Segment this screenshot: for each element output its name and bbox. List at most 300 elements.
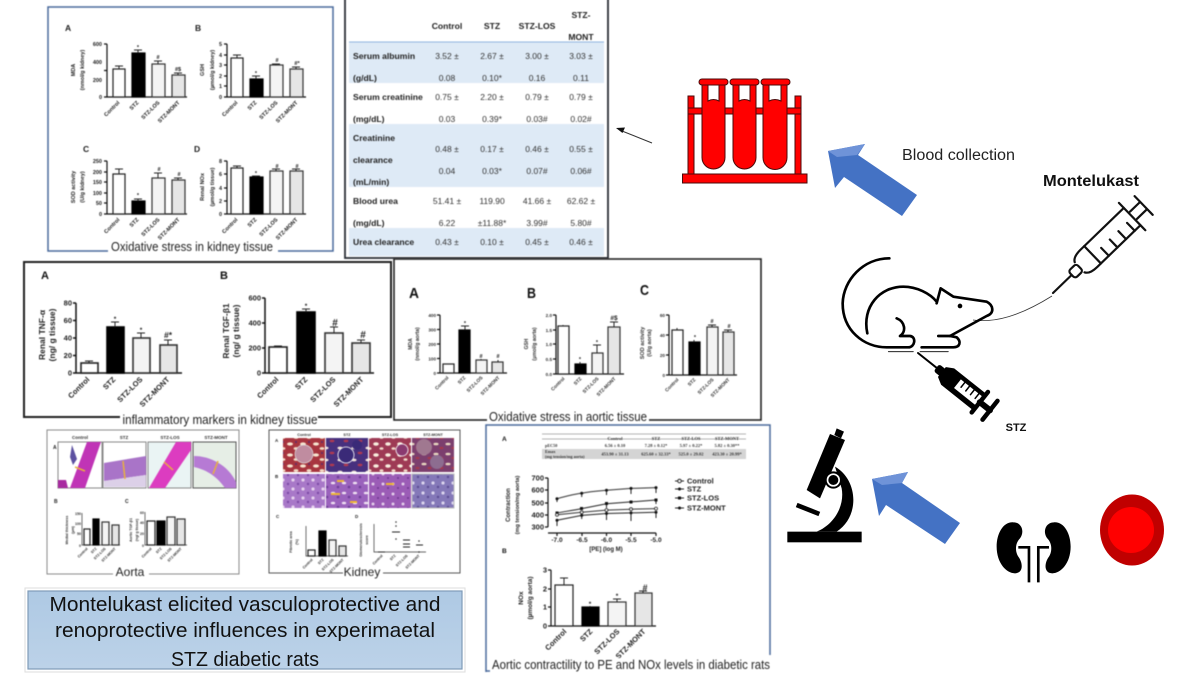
arrow: to microscope <box>872 472 960 544</box>
row: creatinine clearance: 0.06# <box>570 166 592 176</box>
chart A: kidney MDA: #$ <box>175 67 181 73</box>
chart D: glomerulosclerosis score: Control <box>372 554 384 566</box>
chart B: medial thickness: (µm) <box>71 525 75 534</box>
mini table: pEC50 and Emax: STZ <box>652 436 660 441</box>
chart C: kidney SOD: STZ-MONT <box>157 217 182 242</box>
chart B: renal TGF-beta1: B <box>220 270 228 282</box>
mini table: pEC50 and Emax <box>542 434 746 459</box>
chart C: fibrotic area: Control <box>302 558 314 570</box>
panel: inflammatory markers in kidney tissue <box>24 262 391 427</box>
legend: treatment groups <box>675 476 726 512</box>
mini table: pEC50 and Emax: 625.60 ± 32.33* <box>641 452 671 456</box>
bar chart: NOx in aorta: STZ-LOS <box>592 627 621 656</box>
row: creatinine clearance: clearance <box>353 155 393 165</box>
table header <box>432 10 594 42</box>
row: serum creatinine: 0.79 ± <box>569 92 593 102</box>
panel: kidney histology: D <box>355 514 359 519</box>
chart B: kidney GSH: STZ-MONT <box>275 100 300 125</box>
icon: STZ syringe <box>910 343 998 420</box>
chart B: kidney GSH: 0 <box>219 95 222 101</box>
mini table: pEC50 and Emax: 423.30 ± 20.99* <box>712 452 742 456</box>
chart A: renal TNF-alpha: STZ <box>101 375 118 391</box>
chart D: glomerulosclerosis score: STZ-LOS <box>395 553 409 568</box>
bar chart: NOx in aorta: NOx <box>518 591 525 605</box>
bar chart: NOx in aorta: 2 <box>543 584 547 594</box>
chart B: aortic GSH: 1.5 <box>546 328 552 333</box>
row: serum creatinine: 0.02# <box>570 114 592 124</box>
chart A: aortic MDA: STZ-MONT <box>480 375 501 397</box>
row: serum albumin: 0.16 <box>529 73 546 83</box>
icon: rat <box>843 258 992 352</box>
title box <box>25 588 465 672</box>
chart C: kidney SOD: # <box>157 167 161 173</box>
chart C: kidney SOD: 150 <box>93 180 102 186</box>
title box: STZ diabetic rats <box>171 648 319 671</box>
panel: oxidative stress in kidney tissue <box>48 7 333 254</box>
chart C: fibrotic area: Fibrotic area <box>289 530 293 553</box>
chart C: fibrotic area: (%) <box>295 538 299 545</box>
chart B: kidney GSH: # <box>275 58 279 64</box>
chart D: glomerulosclerosis score: STZ-MONT <box>405 553 421 570</box>
chart A: kidney MDA: (nmol/g kidney) <box>80 50 86 90</box>
row: blood urea <box>353 196 595 228</box>
chart B: aortic GSH <box>524 285 624 398</box>
chart A: kidney MDA: STZ-LOS <box>141 100 162 121</box>
panel: kidney histology: B <box>275 474 279 479</box>
chart B: kidney GSH: 3 <box>219 63 222 69</box>
chart A: renal TNF-alpha: Control <box>66 375 91 400</box>
line chart: contraction vs PE <box>506 474 662 553</box>
chart C: aortic TGF-beta: 60 <box>140 511 144 515</box>
chart C: aortic TGF-beta: STZ-LOS <box>159 546 173 561</box>
table header: STZ- <box>571 10 591 20</box>
chart A: aortic MDA: A <box>409 285 419 302</box>
chart A: aortic MDA: * <box>464 321 467 327</box>
legend: treatment groups: STZ <box>687 484 702 494</box>
title box: renoprotective influences in experimaetal <box>55 619 435 642</box>
chart C: kidney SOD <box>71 144 187 242</box>
row: serum creatinine: 0.75 ± <box>435 92 459 102</box>
line chart: contraction vs PE: -5.5 <box>625 537 637 544</box>
chart D: renal NOx: D <box>194 144 200 154</box>
chart D: renal NOx: # <box>275 164 279 170</box>
chart A: aortic MDA: MDA <box>408 338 414 350</box>
chart B: renal TGF-beta1: STZ-MONT <box>332 375 366 409</box>
bar chart: NOx in aorta: 1 <box>543 602 547 612</box>
thread from syringe to rat <box>973 296 1052 321</box>
line chart: contraction vs PE: -5.0 <box>650 537 662 544</box>
chart B: aortic GSH: 1.0 <box>546 342 552 347</box>
row: serum creatinine: 0.39* <box>482 114 503 124</box>
line chart: contraction vs PE: 300 <box>531 522 544 532</box>
chart C: aortic SOD: SOD activity <box>640 326 646 359</box>
table header: STZ-LOS <box>519 21 556 31</box>
chart C: aortic TGF-beta: STZ-MONT <box>167 546 183 563</box>
chart C: kidney SOD: 250 <box>93 159 102 165</box>
chart A: renal TNF-alpha: 0 <box>68 368 72 378</box>
chart A: kidney MDA: Control <box>103 100 122 118</box>
chart B: aortic GSH: 0.5 <box>546 357 552 362</box>
chart B: renal TGF-beta1: 400 <box>248 318 261 328</box>
table header: MONT <box>568 32 594 42</box>
chart B: medial thickness: 50 <box>77 532 81 536</box>
row: serum creatinine: (mg/dL) <box>353 114 385 124</box>
chart C: aortic TGF-beta: Control <box>141 547 153 559</box>
chart C: aortic SOD: 60 <box>660 313 665 318</box>
mini table: pEC50 and Emax: Emax <box>545 449 556 454</box>
chart A: renal TNF-alpha: STZ-MONT <box>138 375 172 409</box>
chart A: renal TNF-alpha: * <box>140 327 143 334</box>
chart D: renal NOx: 0 <box>219 212 222 218</box>
chart B: medial thickness: 0 <box>79 544 81 548</box>
chart A: aortic MDA <box>408 285 507 397</box>
bar chart: NOx in aorta: 0 <box>543 622 547 630</box>
chart C: aortic SOD: STZ-LOS <box>697 377 716 396</box>
row: blood urea: 62.62 ± <box>567 196 595 206</box>
row: serum creatinine: 0.03# <box>526 114 548 124</box>
row: urea clearance: Urea clearance <box>353 237 414 247</box>
image column titles: STZ-LOS <box>160 435 180 440</box>
chart B: kidney GSH: GSH <box>200 64 206 76</box>
mini table: pEC50 and Emax: 6.56 ± 0.10 <box>605 443 626 448</box>
chart A: aortic MDA: 300 <box>428 328 436 332</box>
table header: Control <box>432 21 462 31</box>
chart C: aortic SOD: # <box>710 319 714 325</box>
chart D: renal NOx <box>194 144 306 242</box>
caption: aortic contractility: Aortic contractility to PE and NOx levels in diabetic rats <box>492 658 770 672</box>
bar chart: NOx in aorta: * <box>616 593 619 600</box>
chart B: renal TGF-beta1: 200 <box>248 344 261 352</box>
chart C: fibrotic area <box>289 526 348 574</box>
chart A: kidney MDA: 0 <box>99 95 102 101</box>
chart D: glomerulosclerosis score: STZ <box>389 553 397 562</box>
row: blood urea: (mg/dL) <box>353 218 385 228</box>
chart C: aortic SOD: Control <box>664 377 680 393</box>
chart B: kidney GSH: #* <box>294 61 300 67</box>
chart B: aortic GSH: STZ <box>573 376 583 387</box>
image column titles: STZ-MONT <box>423 433 443 437</box>
chart C: aortic TGF-beta: Aortic TGF-β1 <box>129 518 133 542</box>
chart B: kidney GSH: Control <box>221 100 240 118</box>
chart A: kidney MDA: 600 <box>93 42 102 48</box>
chart A: kidney MDA: # <box>156 55 160 61</box>
chart A: aortic MDA: Control <box>434 375 450 391</box>
chart D: renal NOx: * <box>255 171 258 177</box>
chart B: aortic GSH: B <box>527 285 536 302</box>
line chart: contraction vs PE: -6.0 <box>601 537 612 544</box>
chart D: renal NOx: STZ-LOS <box>259 217 280 238</box>
chart D: renal NOx: STZ <box>247 217 259 229</box>
chart C: aortic SOD: 0 <box>662 373 665 378</box>
row: serum creatinine: 0.79 ± <box>525 92 549 102</box>
bar chart: NOx in aorta: * <box>589 601 592 608</box>
chart B: medial thickness: STZ-LOS <box>93 546 107 561</box>
chart B: renal TGF-beta1: * <box>305 303 308 310</box>
chart C: kidney SOD: 50 <box>96 201 102 207</box>
chart C: aortic TGF-beta: (ng/ g tissue) <box>135 518 139 541</box>
chart A: renal TNF-alpha: #* <box>164 330 173 340</box>
panel: aorta histology: C <box>125 499 129 505</box>
chart B: aortic GSH: (µmol/g aorta) <box>532 327 538 361</box>
chart B: aortic GSH: STZ-LOS <box>582 376 601 395</box>
chart C: aortic SOD: C <box>640 282 649 299</box>
chart C: aortic SOD: (U/g aorta) <box>647 329 653 357</box>
row: serum albumin: 2.67 ± <box>480 51 504 61</box>
chart B: aortic GSH: GSH <box>524 338 530 349</box>
chart C: kidney SOD: C <box>83 144 89 154</box>
histology images: kidney <box>283 438 454 508</box>
chart C: aortic TGF-beta: 40 <box>140 521 144 525</box>
row: serum creatinine: Serum creatinine <box>353 92 423 102</box>
row: serum albumin: Serum albumin <box>353 51 415 61</box>
chart C: kidney SOD: * <box>137 193 140 199</box>
chart B: medial thickness: STZ <box>90 546 98 555</box>
chart A: aortic MDA: 200 <box>428 342 436 347</box>
chart A: renal TNF-alpha: Renal TNF-α <box>37 309 47 360</box>
chart D: renal NOx: 2 <box>219 199 222 205</box>
row: creatinine clearance: 0.07# <box>526 166 548 176</box>
chart C: aortic SOD: 20 <box>660 353 665 358</box>
image column titles: STZ-MONT <box>204 435 228 440</box>
mini table: pEC50 and Emax: pEC50 <box>545 443 557 448</box>
chart C: aortic SOD <box>640 282 737 399</box>
chart D: glomerulosclerosis score: Glomerulosclerosis <box>359 523 363 557</box>
chart B: renal TGF-beta1: # <box>360 330 366 341</box>
chart D: renal NOx: STZ-MONT <box>275 217 300 242</box>
chart B: renal TGF-beta1: Control <box>255 375 280 400</box>
row: serum albumin: (g/dL) <box>353 73 377 83</box>
row: urea clearance <box>353 237 593 247</box>
row: serum albumin: 3.52 ± <box>435 51 459 61</box>
chart B: renal TGF-beta1 <box>220 270 374 409</box>
chart A: kidney MDA: 200 <box>93 78 102 84</box>
panel: aorta histology: B <box>54 499 58 505</box>
row: urea clearance: 0.43 ± <box>435 237 459 247</box>
line chart: contraction vs PE: (mg tension/mg aorta) <box>515 476 521 534</box>
chart D: renal NOx: (µmol/g tissue) <box>210 167 216 206</box>
mini table: pEC50 and Emax: 525.0 ± 29.02 <box>679 452 704 456</box>
chart A: renal TNF-alpha: 60 <box>64 316 72 325</box>
chart B: renal TGF-beta1: (ng/ g tissue) <box>231 304 241 357</box>
chart D: renal NOx: 6 <box>219 172 222 178</box>
line chart: contraction vs PE: 500 <box>531 498 544 508</box>
row: creatinine clearance: 0.46 ± <box>525 144 549 154</box>
chart B: medial thickness: 150 <box>75 512 81 516</box>
bar chart: NOx in aorta: 3 <box>543 566 547 574</box>
chart A: kidney MDA: STZ <box>129 100 141 112</box>
chart B: medial thickness: 100 <box>75 522 81 526</box>
legend: treatment groups: STZ-LOS <box>687 494 719 502</box>
chart B: aortic GSH: * <box>596 340 599 346</box>
chart A: kidney MDA: * <box>137 45 140 51</box>
chart C: kidney SOD: Control <box>103 217 122 235</box>
icon: red blood cell <box>1100 494 1164 566</box>
chart C: kidney SOD: (U/g kidney) <box>80 171 86 203</box>
chart A: aortic MDA: STZ <box>457 375 467 386</box>
chart C: kidney SOD: STZ <box>129 217 141 229</box>
chart B: renal TGF-beta1: Renal TGF-β1 <box>221 303 231 359</box>
chart B: aortic GSH: STZ-MONT <box>596 376 617 398</box>
chart A: aortic MDA: 400 <box>428 313 436 318</box>
caption: Aorta: Aorta <box>116 565 145 579</box>
chart A: renal TNF-alpha: 80 <box>64 298 72 308</box>
row: urea clearance: 0.45 ± <box>525 237 549 247</box>
chart C: fibrotic area: STZ-LOS <box>321 557 335 572</box>
row: serum albumin <box>353 51 593 83</box>
row: blood urea: ±11.88* <box>478 218 507 228</box>
row: blood urea: 51.41 ± <box>433 196 461 206</box>
chart C: kidney SOD: 200 <box>93 170 102 176</box>
caption: Kidney: Kidney <box>344 565 380 579</box>
chart C: fibrotic area: STZ <box>317 557 325 566</box>
line chart: contraction vs PE: 700 <box>531 474 544 482</box>
image column titles: Control <box>72 435 88 440</box>
chart C: kidney SOD: 100 <box>93 191 102 197</box>
histology images: aorta <box>58 442 236 488</box>
line chart: contraction vs PE: 600 <box>531 486 544 494</box>
chart A: kidney MDA <box>65 23 187 125</box>
chart D: glomerulosclerosis score <box>359 522 426 570</box>
row: urea clearance: 0.10 ± <box>480 237 504 247</box>
bar chart: NOx in aorta: # <box>642 583 648 593</box>
row: blood urea: 41.66 ± <box>523 196 551 206</box>
row: blood urea: 119.90 <box>479 196 505 206</box>
bar chart: NOx in aorta: Control <box>543 627 568 652</box>
chart A: renal TNF-alpha: 20 <box>64 351 72 360</box>
line chart: contraction vs PE: [PE] (log M) <box>589 547 623 553</box>
panel: aortic contractility and NOx: B <box>502 548 507 555</box>
bar chart: NOx in aorta: (µmol/g aorta) <box>527 576 534 620</box>
chart B: kidney GSH: 2 <box>219 74 222 80</box>
chart B: kidney GSH: STZ <box>247 100 259 112</box>
chart A: kidney MDA: MDA <box>71 64 77 76</box>
image column titles: STZ <box>343 433 351 437</box>
chart A: renal TNF-alpha: STZ-LOS <box>115 375 144 404</box>
mini table: pEC50 and Emax: 5.82 ± 0.30** <box>715 443 740 448</box>
chart D: renal NOx: Renal NOx <box>200 172 206 201</box>
table header: STZ <box>484 21 500 31</box>
panel: kidney histology: C <box>276 514 280 519</box>
mini table: pEC50 and Emax: STZ-LOS <box>681 436 701 441</box>
bar chart: NOx in aorta <box>518 566 656 661</box>
row: creatinine clearance <box>353 133 593 187</box>
line chart: contraction vs PE: 400 <box>531 510 544 520</box>
chart A: kidney MDA: 400 <box>93 60 102 66</box>
row: blood urea: Blood urea <box>353 196 398 206</box>
row: urea clearance: 0.46 ± <box>569 237 593 247</box>
row: creatinine clearance: Creatinine <box>353 133 395 143</box>
row: serum albumin: 0.10* <box>482 73 503 83</box>
chart C: aortic TGF-beta: 0 <box>142 544 144 548</box>
chart C: aortic SOD: STZ-MONT <box>710 377 731 399</box>
line chart: contraction vs PE: Contraction <box>506 488 512 522</box>
image column titles: Control <box>297 433 311 437</box>
row: serum albumin: 0.11 <box>573 73 589 83</box>
chart D: renal NOx: Control <box>221 217 240 235</box>
chart A: renal TNF-alpha <box>37 270 182 409</box>
image column titles <box>72 435 228 440</box>
chart D: renal NOx: 8 <box>219 159 222 165</box>
chart A: renal TNF-alpha: A <box>41 270 49 282</box>
chart A: renal TNF-alpha: (ng/ g tissue) <box>47 308 57 361</box>
chart B: renal TGF-beta1: STZ-LOS <box>308 375 337 404</box>
chart B: kidney GSH: B <box>195 23 201 33</box>
chart B: aortic GSH: Control <box>550 376 566 392</box>
chart B: aortic GSH: 0.0 <box>546 372 552 377</box>
panel: oxidative stress in aortic tissue <box>394 259 761 424</box>
icon: kidneys <box>997 522 1071 582</box>
chart A: aortic MDA: 0 <box>433 371 436 376</box>
chart B: medial thickness: Medial thickness <box>65 516 69 544</box>
chart C: aortic SOD: # <box>727 324 731 330</box>
panel: aortic contractility and NOx: A <box>502 436 507 443</box>
chart C: fibrotic area: STZ-MONT <box>329 557 345 574</box>
bar chart: NOx in aorta: STZ-MONT <box>614 627 648 661</box>
row: serum creatinine <box>353 92 593 124</box>
label: Montelukast: Montelukast <box>1043 173 1139 190</box>
row: creatinine clearance: (mL/min) <box>353 177 389 187</box>
row: blood urea: 5.80# <box>570 218 592 228</box>
chart B: renal TGF-beta1: STZ <box>293 375 310 391</box>
line chart: contraction vs PE: -7.0 <box>551 537 563 544</box>
title box: Montelukast elicited vasculoprotective and <box>50 593 440 616</box>
chart B: medial thickness: Control <box>77 547 89 559</box>
chart C: aortic TGF-beta: STZ <box>155 546 163 555</box>
image column titles <box>297 433 443 437</box>
caption: oxidative stress aortic: Oxidative stress in aortic tissue <box>489 410 647 424</box>
arrow: blood collection <box>828 144 917 216</box>
chart A: renal TNF-alpha: * <box>114 316 117 323</box>
chart C: aortic SOD: * <box>694 335 697 341</box>
mini table: pEC50 and Emax: Control <box>608 436 623 441</box>
panel: biochemical table <box>345 0 608 258</box>
chart B: medial thickness <box>65 512 120 563</box>
label: STZ: STZ <box>1006 422 1027 434</box>
caption: oxidative stress in kidney tissue: Oxidative stress in kidney tissue <box>111 240 273 254</box>
row: creatinine clearance: 0.17 ± <box>480 144 504 154</box>
chart B: kidney GSH: STZ-LOS <box>259 100 280 121</box>
label: blood collection: Blood collection <box>902 147 1015 164</box>
mini table: pEC50 and Emax: 453.90 ± 31.13 <box>601 452 629 456</box>
chart B: aortic GSH: #$ <box>610 315 618 322</box>
bar chart: NOx in aorta: STZ <box>578 627 595 643</box>
chart C: aortic SOD: 40 <box>660 333 665 338</box>
chart A: renal TNF-alpha: 40 <box>64 334 72 342</box>
caption: inflammatory markers: inflammatory markers in kidney tissue <box>122 413 318 427</box>
row: blood urea: 6.22 <box>439 218 456 228</box>
chart B: kidney GSH: (µmol/g kidney) <box>210 50 216 90</box>
chart B: kidney GSH: * <box>255 71 258 77</box>
image column titles: STZ <box>120 435 129 440</box>
chart B: kidney GSH: 4 <box>219 53 223 59</box>
row: creatinine clearance: 0.03* <box>482 166 503 176</box>
row: creatinine clearance: 0.04 <box>439 166 456 176</box>
chart A: aortic MDA: (nmol/g aorta) <box>415 327 421 361</box>
mini table: pEC50 and Emax: 7.28 ± 0.12* <box>645 443 668 448</box>
chart B: renal TGF-beta1: 600 <box>248 294 261 302</box>
row: serum creatinine: 0.03 <box>439 114 456 124</box>
image column titles: STZ-LOS <box>382 433 399 437</box>
legend: treatment groups: Control <box>687 476 714 486</box>
chart A: aortic MDA: 100 <box>428 356 436 362</box>
chart D: renal NOx: 4 <box>219 186 223 192</box>
row: serum albumin: 3.03 ± <box>569 51 593 61</box>
chart D: glomerulosclerosis score: score <box>365 535 369 545</box>
row: serum creatinine: 2.20 ± <box>480 92 504 102</box>
chart B: medial thickness: STZ-MONT <box>101 546 117 563</box>
chart C: kidney SOD: SOD activity <box>71 170 77 203</box>
panel: aorta histology <box>47 430 239 579</box>
